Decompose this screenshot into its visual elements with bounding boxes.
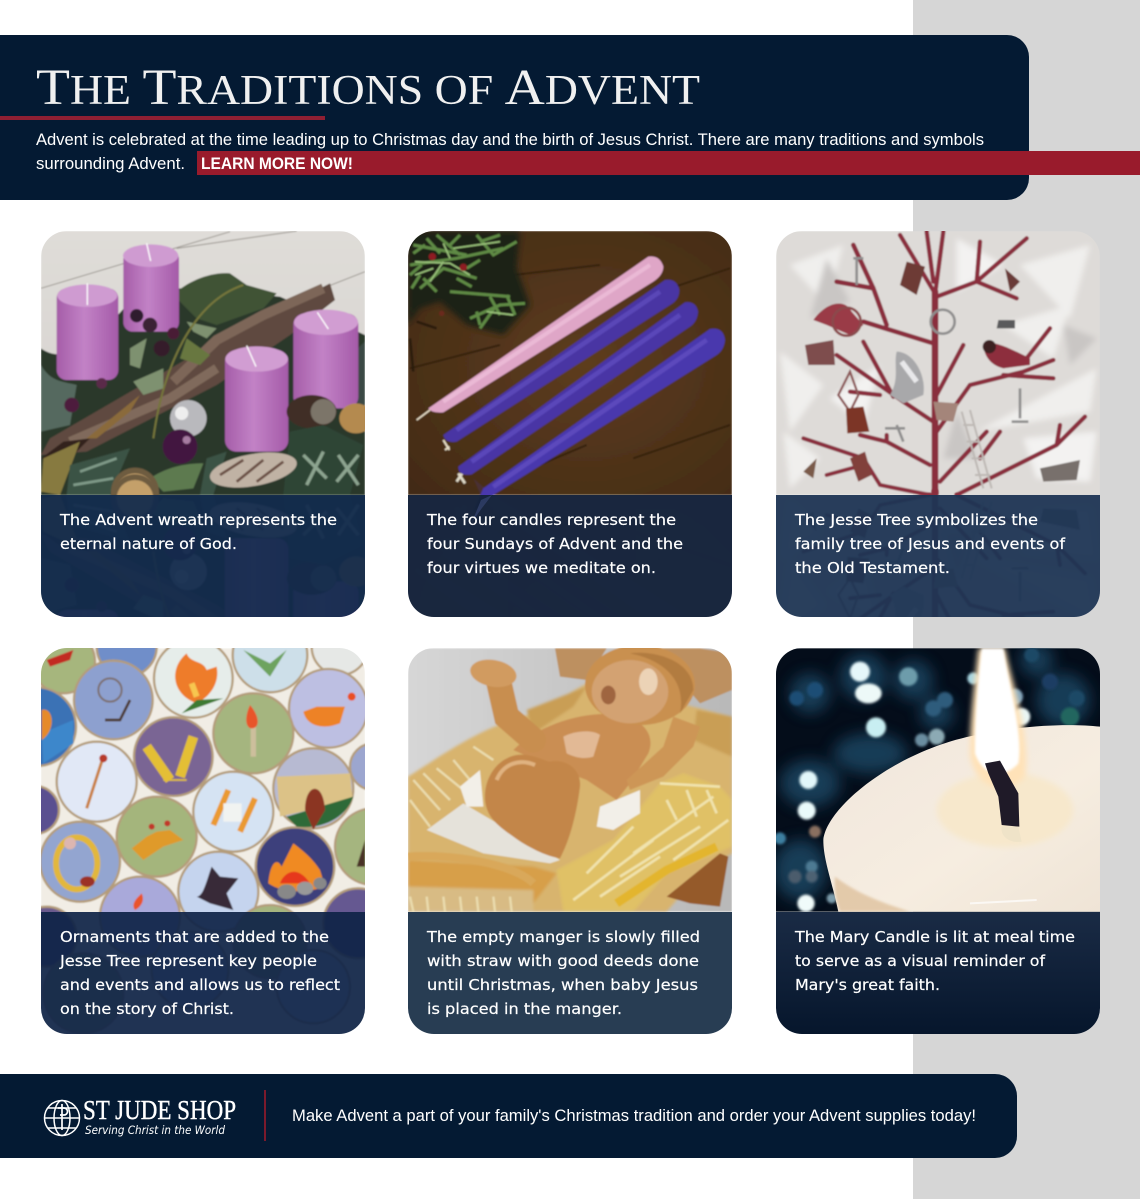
caption panel bbox=[408, 912, 732, 1034]
reflection under caption bbox=[41, 474, 365, 617]
logo wordmark: ST JUDE SHOP bbox=[83, 1095, 236, 1125]
caption text: with straw with good deeds done bbox=[427, 952, 699, 970]
caption text: The Jesse Tree symbolizes the bbox=[794, 511, 1038, 529]
caption text: Jesse Tree represent key people bbox=[59, 952, 317, 970]
caption text: The empty manger is slowly filled bbox=[426, 928, 700, 946]
caption panel bbox=[776, 912, 1100, 1034]
caption text: until Christmas, when baby Jesus bbox=[427, 976, 698, 994]
caption text: eternal nature of God. bbox=[60, 535, 237, 553]
caption text: on the story of Christ. bbox=[60, 1000, 234, 1018]
grey side panel bbox=[913, 0, 1140, 1199]
caption text: Ornaments that are added to the bbox=[60, 928, 329, 946]
caption panel bbox=[41, 912, 365, 1034]
photo: Jesse tree with ornaments bbox=[776, 231, 1100, 498]
caption text: four Sundays of Advent and the bbox=[427, 535, 683, 553]
footer message: Make Advent a part of your family's Christmas tradition and order your Advent supplies today! bbox=[292, 1106, 976, 1125]
caption text: The Advent wreath represents the bbox=[59, 511, 337, 529]
caption text bbox=[426, 511, 683, 577]
card: ornaments bbox=[41, 648, 365, 1034]
intro text: surrounding Advent. bbox=[36, 154, 185, 173]
card: Mary candle bbox=[773, 643, 1100, 1034]
divider bbox=[264, 1090, 266, 1141]
caption text: and events and allows us to reflect bbox=[60, 976, 340, 994]
caption text: the Old Testament. bbox=[795, 559, 950, 577]
caption text: is placed in the manger. bbox=[427, 1000, 622, 1018]
reflection under caption bbox=[408, 479, 732, 617]
footer background bbox=[0, 1074, 1017, 1158]
caption text: The Mary Candle is lit at meal time bbox=[794, 928, 1075, 946]
card: Jesse Tree bbox=[776, 231, 1100, 617]
caption panel bbox=[41, 495, 365, 617]
caption text bbox=[794, 511, 1066, 577]
reflection under caption bbox=[776, 488, 1086, 617]
caption text: family tree of Jesus and events of bbox=[795, 535, 1066, 553]
call-to-action red bar bbox=[197, 151, 1140, 175]
caption panel bbox=[408, 495, 732, 617]
photo: baby Jesus in manger bbox=[408, 645, 732, 912]
learn more link: LEARN MORE NOW! bbox=[201, 154, 353, 173]
card: Advent wreath bbox=[41, 231, 365, 617]
footer banner bbox=[0, 1074, 1017, 1158]
caption text: Mary's great faith. bbox=[795, 976, 940, 994]
candle wick fade in caption bbox=[472, 495, 492, 522]
caption text bbox=[794, 928, 1075, 994]
card: manger bbox=[408, 648, 732, 1034]
header background bbox=[0, 35, 1029, 200]
caption text: The four candles represent the bbox=[426, 511, 676, 529]
caption text bbox=[59, 928, 340, 1018]
header banner bbox=[0, 35, 1140, 200]
icon: St Jude Shop globe logo bbox=[44, 1100, 80, 1136]
reflection under caption bbox=[408, 78, 732, 345]
photo: four taper candles on wood bbox=[408, 231, 732, 512]
intro text bbox=[36, 130, 984, 173]
title: THE TRADITIONS OF ADVENT bbox=[36, 60, 700, 116]
photo: lit white candle with bokeh bbox=[773, 643, 1100, 912]
caption text bbox=[59, 511, 337, 553]
title underline bbox=[0, 116, 325, 120]
photo: wreath with purple candles bbox=[41, 231, 373, 516]
photo: painted wooden ornaments bbox=[41, 648, 365, 1034]
logo tagline: Serving Christ in the World bbox=[85, 1123, 226, 1137]
caption text bbox=[426, 928, 700, 1018]
caption panel bbox=[776, 495, 1100, 617]
caption text: to serve as a visual reminder of bbox=[795, 952, 1046, 970]
intro text: Advent is celebrated at the time leading up to Christmas day and the birth of Jesus Christ. There are many traditions and symbols bbox=[36, 130, 984, 149]
card: four candles bbox=[408, 231, 732, 617]
caption text: four virtues we meditate on. bbox=[427, 559, 656, 577]
